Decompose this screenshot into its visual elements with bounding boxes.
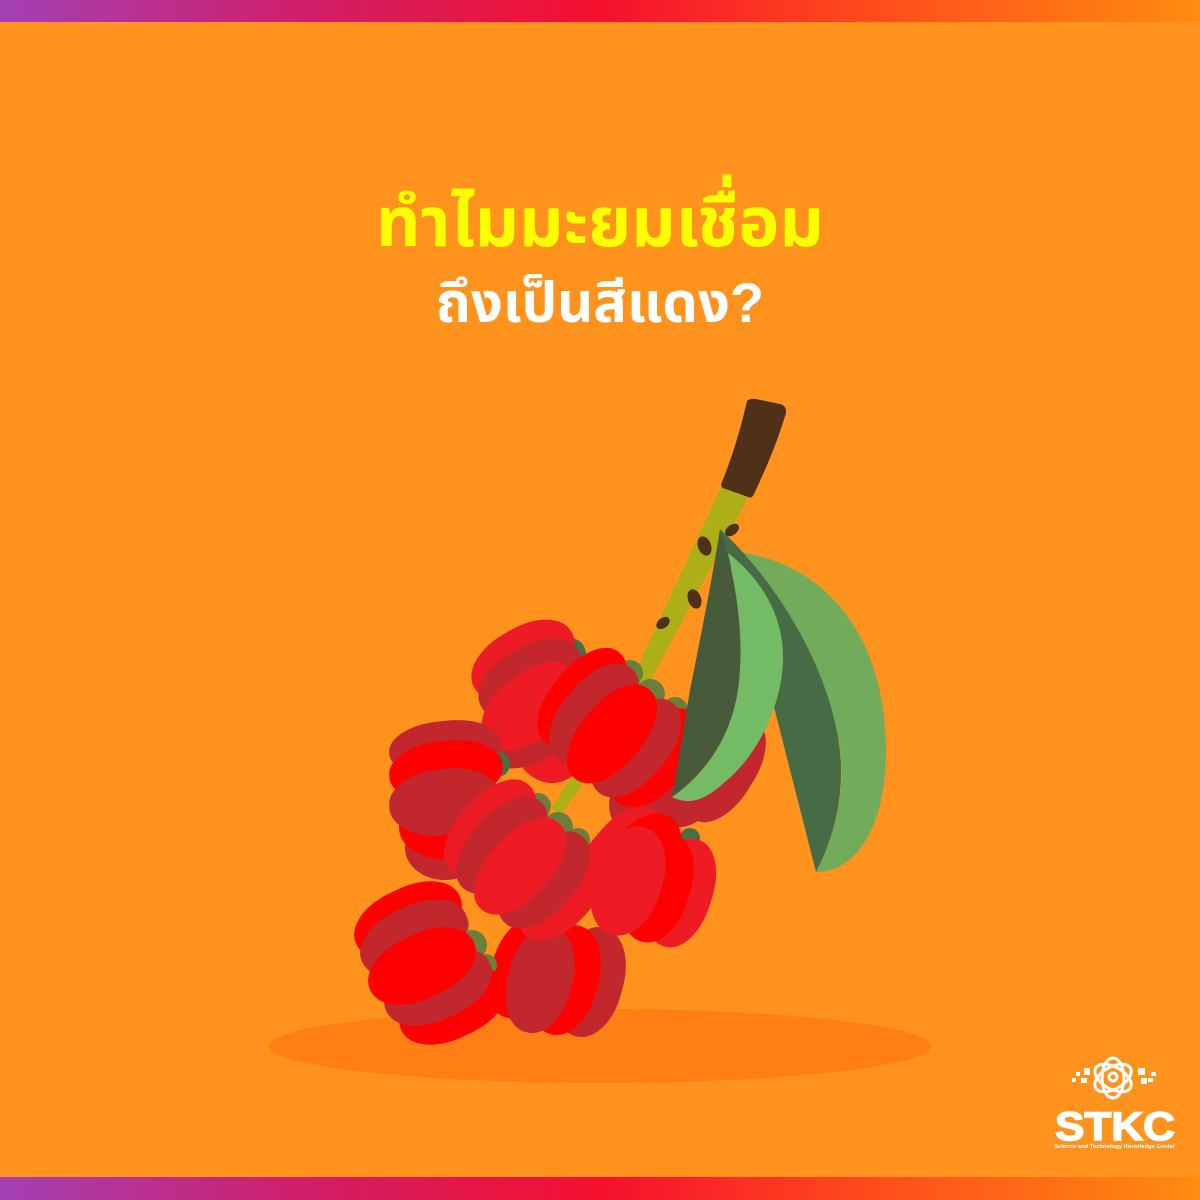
fruit: centre: [428, 764, 626, 956]
top gradient bar: [0, 0, 1200, 22]
back leaf: [720, 529, 886, 872]
branch cut end: [721, 399, 786, 498]
logo wordmark: STKC: [1055, 1105, 1175, 1149]
fruit: top: [459, 604, 599, 784]
logo pixel squares: [1072, 1068, 1156, 1084]
fruit: upper centre: [522, 633, 717, 823]
branch stem: [552, 487, 748, 815]
branch buds: [654, 521, 741, 632]
bottom gradient bar: [0, 1177, 1200, 1200]
logo tagline: Science and Technology Knowledge Center: [1054, 1144, 1176, 1150]
fruit: lower right: [561, 792, 728, 956]
fruit: right, large back lobes: [594, 705, 781, 845]
fruit: bottom left: [343, 867, 518, 1059]
ground shadow: [269, 1009, 931, 1083]
logo atom icon: [1090, 1058, 1136, 1098]
fruit: left: [386, 715, 513, 880]
title: first line: ทำไมมะยมเชื่อม: [376, 184, 824, 261]
front leaf: [672, 529, 783, 801]
title: second line: ถึงเป็นสีแดง?: [436, 271, 764, 334]
fruit: bottom centre: [476, 909, 636, 1045]
